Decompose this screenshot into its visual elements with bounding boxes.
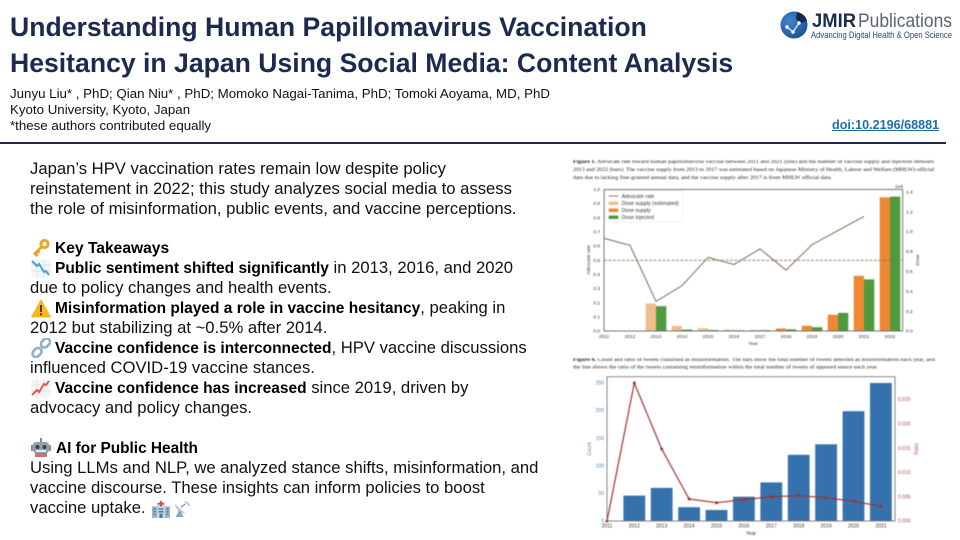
- year labels: [599, 334, 896, 347]
- takeaway: misinformation: 2012 but stabilizing at ~0.5% after 2014.: [30, 318, 327, 337]
- figure 6 caption: [573, 358, 936, 370]
- right axis labels: 1.2: [906, 209, 913, 215]
- year labels: 2011: [602, 524, 613, 530]
- icon: warning: [31, 300, 51, 318]
- panel: figure 1 advocate rate and doses: [572, 159, 935, 347]
- year labels: 2021: [859, 334, 870, 340]
- icon: satellite antenna: [174, 501, 190, 518]
- left axis labels: 0.3: [593, 286, 600, 292]
- figure 1 caption: 2013 and 2022 (bars). The vaccine supply from 2013 to 2017 was estimated based on Japanese Ministry of Health, Labour and Welfare (MHLW)-official: [573, 168, 935, 173]
- icon: hospital: [152, 501, 170, 518]
- authors and affiliation: [10, 86, 550, 133]
- key takeaways heading: Key Takeaways: [55, 240, 169, 257]
- title: Understanding Human Papillomavirus Vaccination: [10, 12, 647, 42]
- year labels: 2016: [729, 334, 740, 340]
- left axis labels: 0.9: [593, 201, 600, 207]
- AI for public health heading: AI for Public Health: [56, 440, 198, 457]
- title: Hesitancy in Japan Using Social Media: Content Analysis: [10, 48, 733, 78]
- year labels: 2018: [781, 334, 792, 340]
- year labels: 2016: [738, 524, 750, 530]
- legend: Dose injected: [622, 215, 654, 221]
- legend: Dose supply: [622, 208, 651, 214]
- takeaway: vaccine confidence increased: [30, 378, 468, 417]
- legend: Dose supply (estimated): [622, 201, 679, 207]
- intro paragraph: Japan’s HPV vaccination rates remain low despite policy: [30, 159, 446, 178]
- count axis labels: [587, 381, 604, 525]
- left axis labels: 0.8: [593, 215, 600, 221]
- year labels: 2017: [755, 334, 766, 340]
- intro paragraph: [30, 159, 517, 218]
- panel: figure 6 misinformation: [572, 357, 936, 537]
- legend: [606, 191, 682, 222]
- right axis labels: 1.0: [906, 229, 913, 235]
- AI paragraph: Using LLMs and NLP, we analyzed stance shifts, misinformation, and: [30, 458, 538, 477]
- ratio axis labels: 0.005: [898, 494, 911, 500]
- ratio axis labels: 0.010: [898, 470, 911, 476]
- header rule: [0, 142, 946, 144]
- icon: chart increasing: [31, 379, 51, 398]
- year labels: 2019: [821, 524, 832, 530]
- right axis labels: 0.8: [906, 249, 913, 255]
- year labels: 2020: [848, 524, 859, 530]
- year labels: 2014: [684, 524, 695, 530]
- header: [10, 10, 952, 133]
- icon: chart decreasing: [31, 259, 51, 278]
- count axis labels: 200: [596, 408, 604, 414]
- left axis labels: 1.0: [593, 187, 600, 193]
- takeaway: vaccine confidence interconnected: Vaccine confidence is interconnected, HPV vaccine discussions: [55, 338, 527, 357]
- ratio axis labels: [898, 397, 920, 525]
- chart: bars of dose supply and injection: [646, 197, 900, 331]
- left axis labels: 0.7: [593, 230, 600, 236]
- intro paragraph: reinstatement in 2022; this study analyzes social media to assess: [30, 179, 512, 198]
- takeaway: public sentiment: [30, 258, 513, 297]
- right axis labels: 1e6: [895, 184, 903, 190]
- ratio axis labels: 0.025: [898, 397, 911, 403]
- year labels: 2017: [766, 524, 777, 530]
- right axis labels: [895, 184, 921, 335]
- doi link: doi:10.2196/68881: [832, 118, 939, 132]
- title: [10, 12, 733, 78]
- figure 1 caption: Figure 1. Advocate rate toward human papillomavirus vaccine between 2011 and 2021 (line) and the number of vaccine supply and injection between: [573, 160, 935, 165]
- chart axes: [604, 190, 903, 331]
- left axis labels: 0.2: [593, 300, 600, 306]
- year labels: 2021: [875, 524, 887, 530]
- year labels: 2012: [625, 334, 636, 340]
- right axis labels: Dose: [915, 254, 921, 266]
- year labels: 2012: [629, 524, 640, 530]
- year labels: 2011: [599, 334, 609, 340]
- AI paragraph: [30, 458, 538, 518]
- year labels: 2022: [885, 334, 896, 340]
- icon: robot: [31, 438, 51, 457]
- ratio axis labels: 0.015: [898, 446, 911, 452]
- chart axes: [607, 377, 895, 521]
- ratio axis labels: 0.000: [898, 519, 911, 525]
- takeaway: vaccine confidence interconnected: [30, 338, 527, 377]
- takeaway: public sentiment: Public sentiment shifted significantly in 2013, 2016, and 2020: [55, 258, 513, 277]
- takeaway: vaccine confidence increased: Vaccine confidence has increased since 2019, driven by: [55, 378, 468, 397]
- figure 6 caption: Figure 6. Count and ratio of tweets classified as misinformation. The bars show the total number of tweets detected as misinformation each year, and: [573, 358, 936, 363]
- chart: misinformation ratio line: [606, 382, 882, 522]
- figure 1 caption: data due to lacking fine-grained annual data, and the vaccine supply after 2017 is from MHLW official data.: [573, 176, 832, 181]
- takeaway: vaccine confidence increased: advocacy and policy changes.: [30, 398, 252, 417]
- logo: JMIR Publications: JMIR: [812, 10, 856, 32]
- right axis labels: 0.4: [906, 289, 913, 295]
- AI paragraph: vaccine uptake.: [30, 498, 146, 517]
- year labels: Year: [746, 531, 756, 537]
- left axis labels: 0.6: [593, 244, 600, 250]
- year labels: [602, 524, 887, 537]
- year labels: 2014: [677, 334, 688, 340]
- legend: Advocate rate: [622, 194, 654, 200]
- left axis labels: Advocate rate: [586, 245, 592, 275]
- figure 1 caption: [573, 160, 935, 181]
- icon: link: [31, 338, 51, 358]
- count axis labels: 50: [598, 491, 604, 497]
- takeaway: public sentiment: due to policy changes and health events.: [30, 278, 332, 297]
- year labels: 2020: [833, 334, 844, 340]
- left axis labels: 0.5: [593, 258, 600, 264]
- year labels: 2015: [703, 334, 714, 340]
- takeaway: vaccine confidence interconnected: influenced COVID-19 vaccine stances.: [30, 358, 315, 377]
- right axis labels: 0.6: [906, 269, 913, 275]
- chart: misinformation count bars: [623, 383, 892, 521]
- right axis labels: 0.2: [906, 309, 913, 315]
- takeaway: misinformation: [30, 298, 505, 337]
- year labels: 2013: [656, 524, 667, 530]
- icon: key: [33, 238, 50, 257]
- authors and affiliation: Kyoto University, Kyoto, Japan: [10, 102, 190, 117]
- left axis labels: [586, 187, 600, 335]
- year labels: 2018: [793, 524, 804, 530]
- year labels: 2013: [651, 334, 662, 340]
- chart: advocate rate line: [604, 216, 903, 301]
- panel: summary text: [30, 159, 538, 518]
- right axis labels: 1.4: [906, 189, 913, 195]
- count axis labels: 250: [596, 381, 604, 387]
- left axis labels: 0.1: [593, 314, 600, 320]
- ratio axis labels: 0.020: [898, 422, 911, 428]
- count axis labels: 150: [596, 436, 604, 442]
- left axis labels: 0.4: [593, 272, 600, 278]
- right axis labels: 0.0: [906, 329, 913, 335]
- year labels: Year: [748, 341, 758, 347]
- figure 6 caption: the line shows the ratio of the tweets containing misinformation within the total number of tweets of opposed stance each year.: [573, 366, 878, 370]
- authors and affiliation: *these authors contributed equally: [10, 118, 211, 133]
- AI paragraph: vaccine discourse. These insights can inform policies to boost: [30, 478, 485, 497]
- logo: JMIR Publications: [780, 10, 952, 40]
- intro paragraph: the role of misinformation, public events, and vaccine perceptions.: [30, 199, 517, 218]
- authors and affiliation: Junyu Liu* , PhD; Qian Niu* , PhD; Momoko Nagai-Tanima, PhD; Tomoki Aoyama, MD, PhD: [10, 86, 550, 101]
- ratio axis labels: Ratio: [914, 443, 920, 455]
- count axis labels: 0: [601, 519, 604, 525]
- year labels: 2019: [807, 334, 818, 340]
- count axis labels: 100: [596, 463, 604, 469]
- year labels: 2015: [711, 524, 722, 530]
- count axis labels: Count: [587, 442, 593, 456]
- takeaway: misinformation: Misinformation played a role in vaccine hesitancy, peaking in: [55, 298, 505, 317]
- left axis labels: 0.0: [593, 329, 600, 335]
